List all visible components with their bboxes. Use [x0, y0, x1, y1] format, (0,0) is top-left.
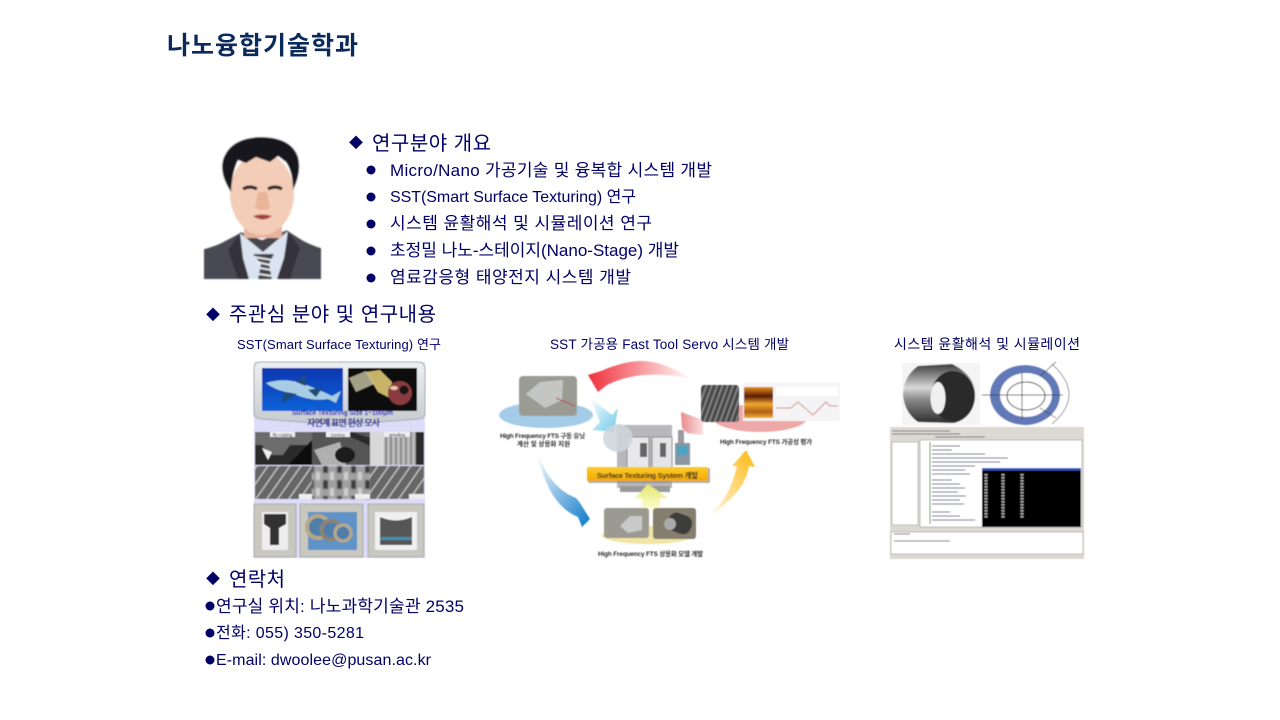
- chrome frame: [254, 362, 425, 425]
- research list item 1: Micro/Nano 가공기술 및 융복합 시스템 개발: [390, 161, 712, 180]
- research list item 5: 염료감응형 태양전지 시스템 개발: [390, 268, 631, 287]
- gold banner: [587, 467, 710, 483]
- process photos row: [255, 432, 424, 465]
- caption: evaluation: High Frequency FTS 가공성 평가: [720, 437, 812, 446]
- arrow: cyan: [590, 398, 618, 432]
- shark photo: [262, 368, 343, 411]
- figure: surface texturing collage: 자연계 표면 현상 모사: [307, 417, 381, 428]
- caption: SST research: SST(Smart Surface Texturing) 연구: [237, 337, 441, 352]
- title: 나노융합기술학과: [167, 32, 358, 60]
- arrow: blue: [537, 452, 590, 527]
- arrow: up lime: [635, 484, 668, 510]
- collage caption: Surface Texturing Size 1~100μm: [292, 408, 393, 417]
- arrow: pink: [681, 412, 703, 435]
- research list item 2: SST(Smart Surface Texturing) 연구: [390, 188, 636, 206]
- microscope texture row: [255, 466, 424, 499]
- machine centre: [603, 424, 690, 492]
- portrait photo: [204, 130, 321, 279]
- heading: main interests: 주관심 분야 및 연구내용: [229, 303, 436, 326]
- arrow: red: [588, 361, 692, 392]
- research list item 3: 시스템 윤활해석 및 시뮬레이션 연구: [390, 214, 652, 233]
- process photos row: turning: [331, 432, 345, 438]
- gold banner: Surface Texturing System 개발: [597, 471, 698, 480]
- process photos row: fly-cutting: [273, 432, 293, 438]
- caption: lubrication analysis: 시스템 윤활해석 및 시뮬레이션: [894, 336, 1080, 352]
- caption: FTS design: [500, 431, 585, 448]
- heading: research overview: 연구분야 개요: [372, 132, 491, 155]
- bearing sleeve photo: [902, 363, 980, 425]
- section: contact: [206, 568, 464, 669]
- dragonfly photo: [348, 368, 417, 411]
- caption: prototype: High Frequency FTS 상용화 모델 개발: [598, 549, 703, 558]
- contact: email: E-mail: dwoolee@pusan.ac.kr: [216, 652, 432, 669]
- caption: FTS design: 계산 및 상용화 지원: [517, 439, 570, 448]
- application photos row: [254, 504, 424, 557]
- contact: phone: 전화: 055) 350-5281: [216, 624, 364, 642]
- heading: contact: [206, 568, 285, 591]
- simulation software window: [890, 427, 1084, 559]
- contact: lab location: 연구실 위치: 나노과학기술관 2535: [216, 597, 464, 616]
- figure: surface texturing collage: [254, 362, 425, 558]
- heading: research overview: ◆: [349, 135, 363, 151]
- bearing diagram: [982, 362, 1082, 425]
- heading: contact: 연락처: [229, 568, 285, 591]
- evaluation charts: [701, 383, 840, 432]
- section: research overview: [349, 132, 712, 287]
- caption: FTS design: High Frequency FTS 구동 유닛: [500, 431, 585, 440]
- caption: fast tool servo: SST 가공용 Fast Tool Servo 시스템 개발: [550, 337, 789, 352]
- figure: surface texturing system diagram: [499, 361, 840, 558]
- blue platform and FTS photo: [499, 376, 593, 428]
- process photos row: grinding: [389, 432, 406, 438]
- prototype photos: [602, 508, 696, 544]
- heading: main interests: ◆: [206, 307, 220, 323]
- research list item 4: 초정밀 나노-스테이지(Nano-Stage) 개발: [390, 241, 679, 260]
- heading: contact: ◆: [206, 571, 220, 587]
- figure: lubrication analysis: [890, 362, 1084, 559]
- arrow: yellow: [702, 450, 755, 520]
